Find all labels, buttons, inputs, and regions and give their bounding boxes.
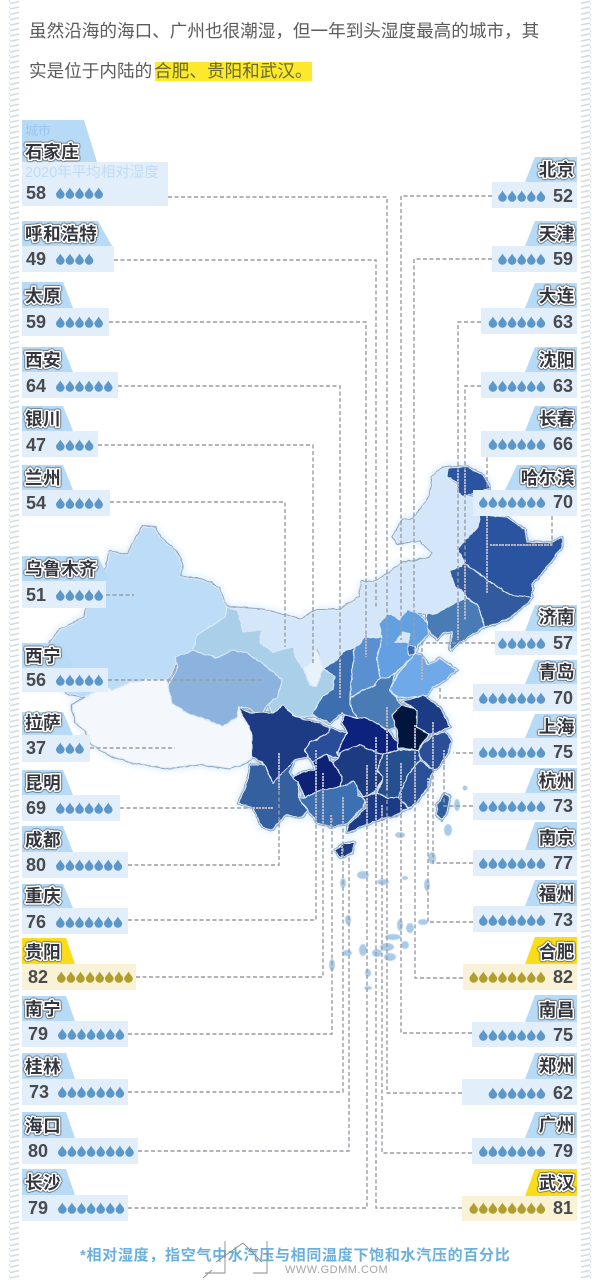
city: 海口 (22, 1112, 138, 1164)
city: 青岛 (473, 660, 577, 711)
city: 合肥 (highlighted) (463, 937, 577, 990)
city: 济南: 济南 (539, 607, 575, 627)
city: 广州: 79 (553, 1141, 573, 1161)
city: 长春: 长春 (539, 409, 575, 429)
city: 郑州: 62 (553, 1083, 573, 1103)
city: 广州: 广州 (539, 1115, 575, 1135)
province: 四川 (238, 705, 330, 783)
city: 济南 (495, 605, 577, 655)
map of China (45, 467, 562, 858)
city: 上海: 75 (553, 742, 573, 762)
city: 南宁: 南宁 (25, 999, 61, 1019)
city: 石家庄 (with legend) (22, 120, 168, 206)
city: 桂林: 桂林 (25, 1057, 61, 1077)
city: 拉萨 (22, 712, 90, 762)
city: 杭州: 73 (553, 796, 573, 816)
city: 大连: 63 (553, 312, 573, 332)
province: 河南 (350, 673, 402, 730)
city: 合肥 (highlighted): 82 (553, 967, 573, 987)
city: 太原 (22, 282, 109, 336)
province: 黑龙江北部 (447, 467, 490, 497)
city: 广州 (472, 1112, 577, 1164)
city: 西安: 64 (26, 376, 46, 396)
city: 大连: 大连 (539, 286, 575, 306)
city: 长沙: 79 (28, 1198, 48, 1218)
city: 重庆 (22, 884, 128, 934)
city: 南京: 南京 (539, 828, 575, 848)
province: 浙江 (418, 732, 452, 770)
city: 南宁 (22, 996, 128, 1047)
city: 兰州 (22, 465, 110, 516)
city: 西安: 西安 (25, 350, 61, 370)
province: 吉林 (450, 563, 532, 627)
city: 天津 (492, 221, 577, 272)
footnote: *相对湿度，指空气中水汽压与相同温度下饱和水汽压的百分比 (80, 1246, 510, 1264)
city: 长春: 66 (553, 434, 573, 454)
city: 海口: 海口 (25, 1116, 61, 1136)
city: 武汉 (highlighted): 81 (553, 1198, 573, 1218)
city: 贵阳 (highlighted): 82 (28, 967, 48, 987)
legend: 城市: 城市 (25, 123, 51, 138)
city: 西宁: 56 (26, 670, 46, 690)
city: 郑州 (462, 1053, 577, 1105)
province: 重庆 (305, 728, 347, 762)
province: 北京 (395, 632, 410, 643)
city: 福州: 福州 (539, 884, 575, 904)
city: 杭州 (473, 768, 577, 820)
city: 银川 (22, 406, 98, 457)
city: 北京: 52 (553, 186, 573, 206)
province: 江西 (377, 750, 420, 798)
province: 山西 (350, 637, 382, 697)
province: 辽宁 (427, 598, 485, 650)
intro text (29, 21, 539, 81)
south china sea islands (329, 786, 468, 990)
province: 湖南 (333, 745, 383, 797)
province: 内蒙古 (227, 467, 483, 668)
watermark (203, 1241, 388, 1278)
city: 长沙 (22, 1169, 128, 1221)
province: 黑龙江 (458, 515, 562, 597)
watermark: WWW.GDMM.COM (285, 1264, 388, 1276)
city: 桂林: 73 (29, 1082, 49, 1102)
city: 济南: 57 (553, 633, 573, 653)
city: 青岛: 青岛 (539, 662, 575, 682)
city: 福州: 73 (553, 910, 573, 930)
city: 南宁: 79 (28, 1024, 48, 1044)
city: 兰州: 54 (26, 493, 46, 513)
province: 天津 (408, 645, 415, 655)
city: 太原: 太原 (25, 286, 61, 306)
city: 昆明 (22, 770, 120, 821)
legend: 平均相对湿度: 2020年平均相对湿度 (25, 164, 159, 181)
city: 呼和浩特: 呼和浩特 (25, 224, 97, 244)
city: 南昌: 南昌 (539, 1000, 575, 1020)
city: 成都: 成都 (25, 830, 61, 850)
city: 哈尔滨: 哈尔滨 (521, 468, 575, 488)
province: 台湾 (437, 793, 450, 820)
city: 南京: 77 (553, 853, 573, 873)
province: 广西 (298, 782, 367, 827)
city: 重庆: 重庆 (25, 886, 61, 906)
city: 武汉 (highlighted) (462, 1169, 577, 1221)
intro text: 实是位于内陆的合肥、贵阳和武汉。 (29, 61, 313, 81)
city: 兰州: 兰州 (25, 468, 61, 488)
city: 乌鲁木齐 (22, 556, 110, 608)
city: 杭州: 杭州 (539, 771, 575, 791)
city: 南京 (473, 822, 577, 876)
leader lines (90, 196, 552, 1208)
city: 乌鲁木齐: 51 (26, 585, 46, 605)
city: 昆明: 昆明 (25, 773, 61, 793)
city: 成都: 80 (26, 855, 46, 875)
city: 石家庄 (with legend): 石家庄 (25, 142, 79, 162)
city: 哈尔滨: 70 (553, 492, 573, 512)
city: 重庆: 76 (26, 912, 46, 932)
province: 贵州 (293, 755, 342, 798)
city: 拉萨: 拉萨 (25, 713, 61, 733)
province: 宁夏 (303, 648, 323, 687)
city: 西宁: 西宁 (25, 646, 61, 666)
province: 广东 (348, 793, 408, 833)
city: 福州 (473, 880, 577, 932)
province: 新疆 (45, 527, 227, 697)
city: 石家庄 (with legend): 58 (26, 183, 46, 203)
city: 上海 (473, 714, 577, 765)
province: 江苏 (402, 695, 450, 735)
city: 上海: 上海 (539, 717, 575, 737)
city: 大连 (481, 283, 577, 334)
city: 西安 (22, 347, 118, 398)
city: 长春 (481, 406, 577, 457)
province: 青海 (168, 650, 282, 727)
city: 银川: 银川 (25, 409, 61, 429)
province: 山东 (390, 653, 457, 698)
city: 海口: 80 (28, 1141, 48, 1161)
city: 银川: 47 (26, 435, 46, 455)
city: 呼和浩特 (22, 221, 114, 272)
city: 沈阳 (481, 347, 577, 398)
province: 西藏 (72, 679, 252, 768)
city: 青岛: 70 (553, 688, 573, 708)
intro text: 虽然沿海的海口、广州也很潮湿，但一年到头湿度最高的城市，其 (29, 21, 539, 41)
city: 西宁 (22, 643, 108, 692)
city: 长沙: 长沙 (25, 1173, 61, 1193)
city: 桂林 (22, 1053, 128, 1105)
city: 北京: 北京 (539, 160, 575, 180)
city: 沈阳: 63 (553, 376, 573, 396)
city: 拉萨: 37 (26, 738, 46, 758)
city: 呼和浩特: 49 (26, 249, 46, 269)
city: 贵阳 (highlighted): 贵阳 (25, 942, 61, 962)
province: 湖北 (337, 715, 398, 755)
city: 郑州: 郑州 (539, 1056, 575, 1076)
city: 昆明: 69 (26, 798, 46, 818)
city: 天津: 59 (553, 249, 573, 269)
province: 海南 (335, 843, 355, 858)
city: 天津: 天津 (539, 224, 575, 244)
province: 河北 (377, 610, 428, 678)
province: 福建 (398, 760, 433, 808)
city: 北京 (492, 157, 577, 208)
city: 合肥 (highlighted): 合肥 (539, 942, 575, 962)
city: 武汉 (highlighted): 武汉 (539, 1173, 575, 1193)
city: 南昌: 75 (553, 1025, 573, 1045)
city: 沈阳: 沈阳 (539, 350, 575, 370)
province: 陕西 (312, 647, 357, 723)
city: 贵阳 (highlighted) (22, 938, 136, 990)
city: 太原: 59 (26, 312, 46, 332)
province: 甘肃 (193, 607, 335, 718)
city: 成都 (22, 826, 128, 878)
province: 安徽 (392, 705, 430, 750)
city: 乌鲁木齐: 乌鲁木齐 (25, 559, 97, 579)
city: 哈尔滨 (473, 465, 577, 516)
city: 南昌 (472, 995, 577, 1047)
province: 云南 (238, 760, 308, 830)
